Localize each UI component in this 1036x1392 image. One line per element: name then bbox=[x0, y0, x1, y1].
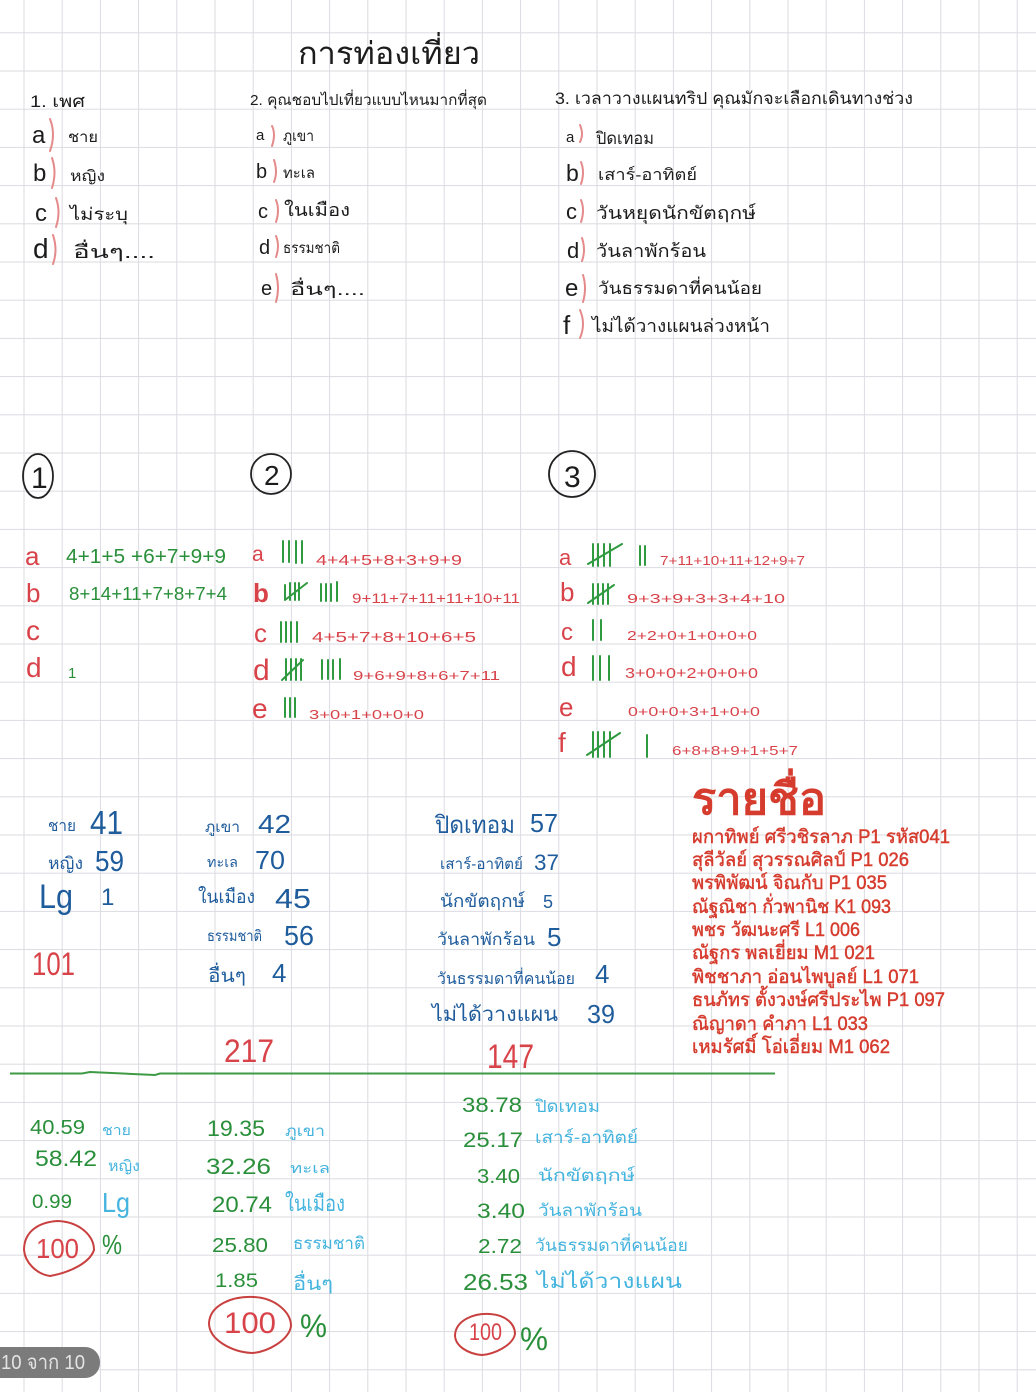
percentages: question 2: 19.35 bbox=[207, 1116, 265, 1141]
counts: question 1: Lg bbox=[39, 878, 73, 916]
row c: c bbox=[561, 619, 573, 646]
percentages: question 3: ไม่ได้วางแผน bbox=[535, 1270, 682, 1293]
counts: question 2: ธรรมชาติ bbox=[207, 928, 262, 945]
total: 100% circled bbox=[209, 1297, 327, 1353]
option a: a bbox=[32, 122, 46, 149]
option d bbox=[567, 238, 706, 263]
row e: e bbox=[252, 693, 268, 724]
option a: ภูเขา bbox=[283, 128, 314, 145]
counts: question 3: เสาร์-อาทิตย์ bbox=[440, 856, 523, 873]
counts: question 1: 1 bbox=[101, 884, 114, 911]
option b: หญิง bbox=[70, 168, 105, 185]
option e bbox=[261, 274, 365, 302]
list of names: ผกาทิพย์ ศรีวชิรลาภ P1 รหัส041 bbox=[692, 826, 950, 848]
tally: question 2 bbox=[252, 541, 520, 724]
list of names: พชร วัฒนะศรี L1 006 bbox=[692, 919, 860, 941]
row c: c bbox=[26, 615, 40, 646]
row a: a bbox=[25, 541, 40, 571]
total: 100% circled: % bbox=[520, 1321, 548, 1357]
percentages: question 2 bbox=[206, 1116, 365, 1353]
option f: ไม่ได้วางแผนล่วงหน้า bbox=[590, 315, 770, 336]
percentages: question 1: Lg bbox=[102, 1187, 130, 1218]
row a: 7+11+10+11+12+9+7 bbox=[660, 553, 805, 568]
row b bbox=[26, 578, 227, 608]
option b bbox=[33, 158, 105, 188]
icon: circled 2: 2 bbox=[264, 460, 280, 491]
option e: e bbox=[261, 278, 272, 300]
counts: question 2: ทะเล bbox=[207, 854, 238, 870]
option a bbox=[256, 126, 314, 146]
option c bbox=[258, 199, 350, 223]
counts: question 3: 5 bbox=[547, 922, 561, 952]
counts: question 3: นักขัตฤกษ์ bbox=[440, 891, 525, 911]
heading: names: รายชื่อ bbox=[692, 768, 826, 824]
option b bbox=[256, 160, 315, 183]
counts: question 3: 37 bbox=[534, 850, 559, 875]
percentages: question 2: 1.85 bbox=[215, 1271, 258, 1292]
counts: question 2: ในเมือง bbox=[198, 886, 255, 908]
list of names: ณัฐณิชา กั่วพานิช K1 093 bbox=[692, 893, 891, 918]
option b: ทะเล bbox=[283, 165, 315, 182]
total: 100% circled: % bbox=[102, 1229, 122, 1260]
row f bbox=[558, 727, 798, 758]
panel: question 3 bbox=[555, 89, 913, 340]
option d: วันลาพักร้อน bbox=[596, 241, 706, 261]
percentages: question 3: วันธรรมดาที่คนน้อย bbox=[535, 1233, 688, 1255]
option a bbox=[32, 119, 98, 151]
row d bbox=[253, 654, 500, 687]
percentages: question 3 bbox=[455, 1094, 688, 1357]
row b: b bbox=[26, 578, 40, 608]
percentages: question 2: ธรรมชาติ bbox=[293, 1234, 365, 1253]
total: 100% circled bbox=[455, 1314, 548, 1357]
option b: b bbox=[566, 160, 579, 186]
option a: ชาย bbox=[68, 129, 98, 146]
panel: question 2 bbox=[250, 89, 487, 302]
heading: question 1: 1. เพศ bbox=[30, 92, 85, 111]
counts: question 3 bbox=[430, 808, 615, 1076]
option a: a bbox=[256, 127, 265, 144]
row e bbox=[559, 692, 760, 722]
counts: question 1: หญิง bbox=[48, 854, 83, 873]
row a: 4+4+5+8+3+9+9 bbox=[316, 552, 462, 569]
percentages: question 3: 2.72 bbox=[478, 1236, 522, 1258]
percentages: question 1 bbox=[24, 1117, 140, 1276]
row a bbox=[559, 544, 805, 570]
row e: e bbox=[559, 692, 573, 722]
list of names: ณิญาดา คำภา L1 033 bbox=[692, 1014, 868, 1035]
percentages: question 3: 3.40 bbox=[477, 1200, 525, 1223]
percentages: question 3: 26.53 bbox=[463, 1269, 528, 1295]
percentages: question 1: 40.59 bbox=[30, 1117, 85, 1139]
option c: วันหยุดนักขัตฤกษ์ bbox=[596, 203, 756, 224]
icon: circled 1 bbox=[23, 454, 53, 498]
page counter badge: 10 จาก 10 bbox=[1, 1352, 85, 1374]
counts: question 2: 45 bbox=[275, 883, 311, 914]
option d: d bbox=[567, 238, 579, 263]
percentages: question 3: เสาร์-อาทิตย์ bbox=[535, 1128, 638, 1147]
total: 101: 101 bbox=[32, 946, 75, 982]
option b bbox=[566, 160, 697, 186]
divider line bbox=[10, 1072, 775, 1075]
row e: 0+0+0+3+1+0+0 bbox=[628, 704, 760, 719]
row d bbox=[561, 651, 758, 682]
option b: b bbox=[256, 161, 267, 183]
option d: ธรรมชาติ bbox=[283, 240, 340, 257]
counts: question 1: 59 bbox=[95, 846, 124, 878]
list of names bbox=[692, 826, 950, 1058]
option f: f bbox=[563, 310, 571, 340]
total: 100% circled: 100 bbox=[36, 1233, 79, 1264]
row b: 9+3+9+3+3+4+10 bbox=[627, 591, 785, 606]
icon: circled 3 bbox=[549, 451, 595, 497]
percentages: question 3: 25.17 bbox=[463, 1129, 523, 1152]
heading: question 2: 2. คุณชอบไปเที่ยวแบบไหนมากที่สุด bbox=[250, 89, 487, 110]
option c: ในเมือง bbox=[284, 199, 350, 220]
counts: question 3: 5 bbox=[543, 892, 553, 912]
total: 147: 147 bbox=[487, 1038, 534, 1076]
row c: 2+2+0+1+0+0+0 bbox=[627, 628, 757, 643]
row c bbox=[254, 618, 476, 648]
total: 100% circled: 100 bbox=[224, 1307, 276, 1340]
option d: d bbox=[259, 237, 270, 259]
counts: question 3: 39 bbox=[587, 999, 615, 1029]
counts: question 1 bbox=[32, 804, 124, 982]
percentages: question 3: นักขัตฤกษ์ bbox=[538, 1166, 636, 1185]
row c bbox=[561, 619, 757, 646]
list of names: พิชชาภา อ่อนไพบูลย์ L1 071 bbox=[692, 966, 919, 988]
option d: d bbox=[33, 233, 49, 264]
row d bbox=[26, 652, 76, 683]
option d bbox=[33, 233, 155, 264]
total: 100% circled: % bbox=[300, 1308, 327, 1344]
row d: 3+0+0+2+0+0+0 bbox=[625, 665, 758, 682]
option e: e bbox=[565, 275, 578, 302]
row d: d bbox=[253, 654, 270, 687]
tally: question 1 bbox=[25, 541, 227, 683]
row f: 6+8+8+9+1+5+7 bbox=[672, 743, 798, 758]
total: 100% circled bbox=[24, 1221, 122, 1276]
row e bbox=[252, 693, 424, 724]
total: 217: 217 bbox=[224, 1033, 274, 1069]
counts: question 3: ไม่ได้วางแผน bbox=[430, 1003, 558, 1026]
row b bbox=[560, 577, 785, 607]
row b bbox=[253, 578, 520, 608]
percentages: question 1: ชาย bbox=[102, 1122, 131, 1138]
option e: วันธรรมดาที่คนน้อย bbox=[598, 276, 762, 298]
list of names: ณัฐกร พลเยี่ยม M1 021 bbox=[692, 939, 875, 964]
counts: question 3: ปิดเทอม bbox=[434, 812, 515, 839]
list of names: เหมรัศมิ์ โอ่เอี่ยม M1 062 bbox=[692, 1032, 890, 1058]
list of names: พรพิพัฒน์ จิณกับ P1 035 bbox=[692, 872, 887, 894]
option a: a bbox=[566, 129, 575, 146]
icon: circled 1: 1 bbox=[31, 462, 48, 495]
panel: question 1 bbox=[30, 92, 155, 264]
row a: a bbox=[252, 543, 264, 566]
percentages: question 2: อื่นๆ bbox=[293, 1270, 333, 1295]
panel: name list bbox=[692, 768, 950, 1058]
counts: question 2 bbox=[198, 809, 314, 1069]
icon: circled 3: 3 bbox=[564, 461, 581, 494]
percentages: question 3: 38.78 bbox=[462, 1094, 522, 1117]
row c: 4+5+7+8+10+6+5 bbox=[312, 629, 476, 646]
percentages: question 1: 0.99 bbox=[32, 1192, 72, 1213]
row a: a bbox=[559, 545, 572, 570]
counts: question 1: ชาย bbox=[48, 818, 76, 835]
row d: 9+6+9+8+6+7+11 bbox=[353, 668, 500, 683]
row b: b bbox=[560, 577, 574, 607]
counts: question 2: 42 bbox=[258, 809, 291, 839]
row b: 8+14+11+7+8+7+4 bbox=[69, 584, 227, 604]
option c: c bbox=[258, 201, 268, 223]
counts: question 3: วันลาพักร้อน bbox=[437, 930, 535, 949]
row a bbox=[25, 541, 226, 571]
option f bbox=[563, 310, 770, 340]
option d bbox=[259, 236, 340, 259]
row f: f bbox=[558, 727, 566, 758]
option e bbox=[565, 275, 762, 302]
total: 100% circled: 100 bbox=[469, 1319, 502, 1346]
option b: b bbox=[33, 160, 46, 187]
title: การท่องเที่ยว bbox=[298, 32, 480, 71]
percentages: question 2: ทะเล bbox=[290, 1160, 330, 1176]
counts: question 2: 4 bbox=[272, 958, 286, 988]
percentages: question 1: หญิง bbox=[108, 1158, 140, 1175]
row d: d bbox=[26, 652, 42, 683]
counts: question 2: อื่นๆ bbox=[208, 962, 246, 987]
option c: c bbox=[566, 199, 577, 224]
option c: ไม่ระบุ bbox=[68, 204, 128, 225]
percentages: question 3: ปิดเทอม bbox=[534, 1097, 600, 1116]
option e: อื่นๆ.... bbox=[290, 277, 365, 299]
row e: 3+0+1+0+0+0 bbox=[309, 707, 424, 722]
percentages: question 1: 58.42 bbox=[35, 1146, 97, 1171]
counts: question 2: 70 bbox=[255, 845, 285, 875]
row a bbox=[252, 541, 462, 569]
row d: d bbox=[561, 651, 577, 682]
counts: question 3: วันธรรมดาที่คนน้อย bbox=[437, 967, 575, 988]
row b: 9+11+7+11+11+10+11 bbox=[352, 590, 520, 606]
counts: question 2: 56 bbox=[284, 920, 314, 951]
option d: อื่นๆ.... bbox=[73, 239, 155, 262]
list of names: ธนภัทร ตั้งวงษ์ศรีประไพ P1 097 bbox=[692, 986, 945, 1011]
option b: เสาร์-อาทิตย์ bbox=[598, 165, 697, 184]
row b: b bbox=[253, 578, 269, 608]
row c: c bbox=[254, 618, 267, 648]
percentages: question 2: 32.26 bbox=[206, 1154, 271, 1179]
counts: question 1: 41 bbox=[90, 804, 123, 841]
option c: c bbox=[35, 200, 47, 227]
row a: 4+1+5 +6+7+9+9 bbox=[66, 546, 226, 568]
percentages: question 2: 20.74 bbox=[212, 1192, 272, 1217]
counts: question 3: 4 bbox=[595, 959, 609, 989]
percentages: question 2: ในเมือง bbox=[285, 1191, 345, 1216]
icon: circled 2 bbox=[251, 454, 291, 494]
option c bbox=[566, 199, 756, 224]
percentages: question 3: 3.40 bbox=[477, 1166, 520, 1188]
heading: question 3: 3. เวลาวางแผนทริป คุณมักจะเลือกเดินทางช่วง bbox=[555, 89, 913, 109]
list of names: สุลีวัลย์ สุวรรณศิลป์ P1 026 bbox=[692, 849, 909, 872]
percentages: question 2: 25.80 bbox=[212, 1235, 268, 1257]
percentages: question 2: ภูเขา bbox=[285, 1123, 325, 1140]
option a: ปิดเทอม bbox=[595, 129, 654, 148]
counts: question 2: ภูเขา bbox=[205, 819, 240, 836]
page counter badge bbox=[0, 1347, 100, 1378]
row d: 1 bbox=[68, 665, 76, 682]
tally: question 3 bbox=[558, 544, 805, 758]
counts: question 3: 57 bbox=[530, 808, 558, 838]
option c bbox=[35, 198, 128, 227]
option a bbox=[566, 125, 654, 148]
percentages: question 3: วันลาพักร้อน bbox=[538, 1201, 642, 1220]
